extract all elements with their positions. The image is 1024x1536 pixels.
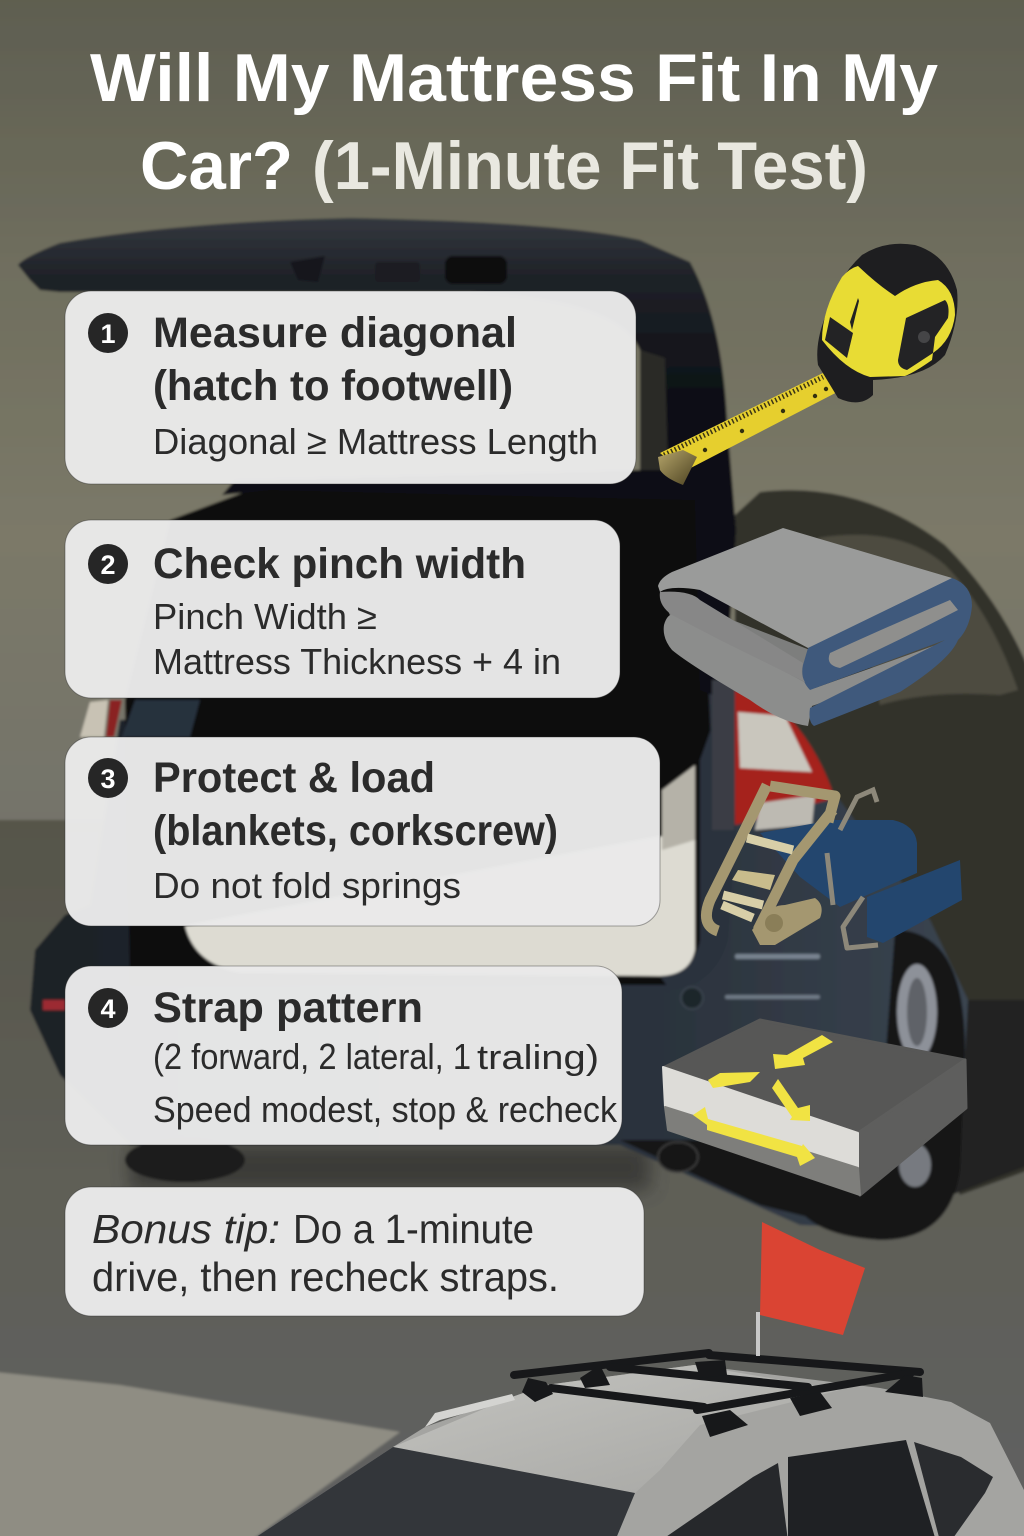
heading step 4: Strap pattern xyxy=(153,984,423,1032)
panel: bonus tip: drive, then recheck straps. xyxy=(92,1254,559,1300)
icon: tape measure xyxy=(658,244,958,485)
body step 4: traling) xyxy=(477,1039,599,1077)
badge 4: 4 xyxy=(100,994,116,1024)
icon: silver car with roof rack xyxy=(250,1353,1024,1536)
title xyxy=(90,40,938,204)
badge 3 xyxy=(88,758,128,798)
icon: ratchet strap xyxy=(706,785,962,948)
panel: step 4 strap pattern xyxy=(65,966,622,1145)
title: Car? xyxy=(140,128,293,204)
heading step 3: (blankets, corkscrew) xyxy=(153,807,558,855)
title: (1-Minute Fit Test) xyxy=(312,128,868,204)
heading step 2: Check pinch width xyxy=(153,540,526,588)
badge 2 xyxy=(88,544,128,584)
heading step 1 xyxy=(153,309,517,410)
body step 2: Pinch Width ≥ xyxy=(153,596,377,637)
body step 4: (2 forward, 2 lateral, 1 xyxy=(153,1036,471,1077)
heading step 3 xyxy=(153,754,558,855)
badge 2: 2 xyxy=(100,550,116,580)
badge 1: 1 xyxy=(100,319,116,349)
panel: bonus tip: Do a 1-minute xyxy=(293,1206,534,1252)
badge 1 xyxy=(88,313,128,353)
badge 3: 3 xyxy=(100,764,116,794)
roof rack xyxy=(514,1353,923,1437)
heading step 1: Measure diagonal xyxy=(153,309,517,357)
body step 4: Speed modest, stop & recheck xyxy=(153,1089,618,1130)
panel: step 2 check pinch width xyxy=(65,520,620,698)
body step 3: Do not fold springs xyxy=(153,865,461,906)
panel: step 1 measure diagonal xyxy=(65,291,636,484)
heading step 1: (hatch to footwell) xyxy=(153,362,513,410)
icon: folded moving blanket xyxy=(658,528,972,726)
body step 2 xyxy=(153,596,561,682)
icon: red flag on pole xyxy=(756,1222,865,1356)
body step 2: Mattress Thickness + 4 in xyxy=(153,641,561,682)
heading step 3: Protect & load xyxy=(153,754,435,802)
panel: bonus tip xyxy=(65,1187,644,1316)
title: Will My Mattress Fit In My xyxy=(90,40,938,116)
body step 1: Diagonal ≥ Mattress Length xyxy=(153,421,598,462)
body step 4 xyxy=(153,1036,618,1130)
panel: step 3 protect and load xyxy=(65,737,660,926)
panel: bonus tip: Bonus tip: xyxy=(92,1206,280,1252)
badge 4 xyxy=(88,988,128,1028)
strap arrows xyxy=(693,1035,833,1166)
icon: mattress with strap arrows xyxy=(663,1020,966,1195)
